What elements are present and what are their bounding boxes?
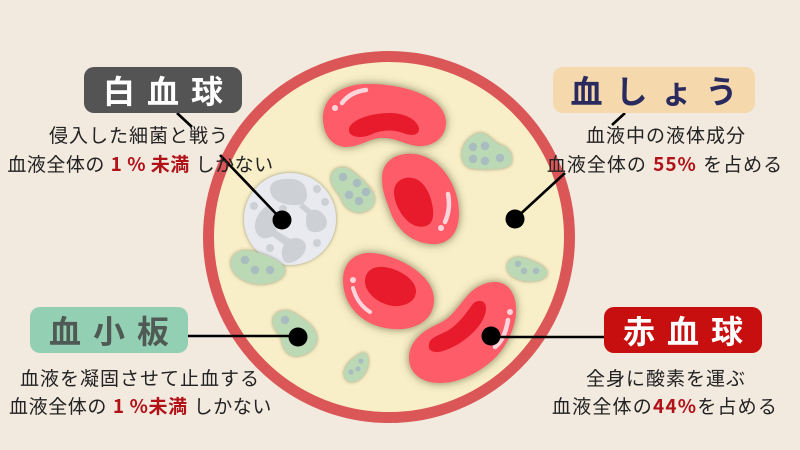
text: red blood cell role: 全身に酸素を運ぶ: [586, 369, 746, 390]
label: plasma: [553, 67, 755, 113]
red blood cell: center: [343, 253, 434, 329]
label: red blood cell: [604, 307, 762, 353]
platelet 3: [231, 250, 285, 284]
platelet 1: [331, 167, 374, 212]
label: white blood cell: 白血球: [103, 74, 235, 110]
blood vessel circle: [208, 56, 570, 418]
leader lines and markers: [177, 113, 625, 346]
white blood cell: [244, 173, 336, 265]
text: red blood cell share: 血液全体の44%を占める: [552, 392, 778, 419]
text: platelet share: 血液全体の 1 %未満 しかない: [9, 392, 272, 419]
text: white blood cell share: 血液全体の 1 % 未満 しかない: [7, 150, 274, 177]
label: platelet: [30, 307, 188, 353]
platelet 2: [462, 133, 512, 169]
red blood cell: lower right: [409, 282, 516, 383]
platelet 6: [507, 257, 547, 281]
label: red blood cell: 赤血球: [623, 314, 755, 350]
text: plasma share: 血液全体の 55% を占める: [547, 150, 783, 177]
label: white blood cell: [84, 67, 242, 113]
text: platelet role: 血液を凝固させて止血する: [20, 369, 260, 390]
red blood cell: upper right: [382, 154, 459, 244]
platelet 5: [344, 353, 368, 382]
label: platelet: 血小板: [49, 314, 181, 350]
label: plasma: 血しょう: [570, 74, 750, 110]
text: plasma role: 血液中の液体成分: [586, 126, 746, 147]
platelet 4: [273, 311, 317, 356]
red blood cell: top: [323, 84, 446, 147]
text: white blood cell role: 侵入した細菌と戦う: [49, 126, 229, 147]
